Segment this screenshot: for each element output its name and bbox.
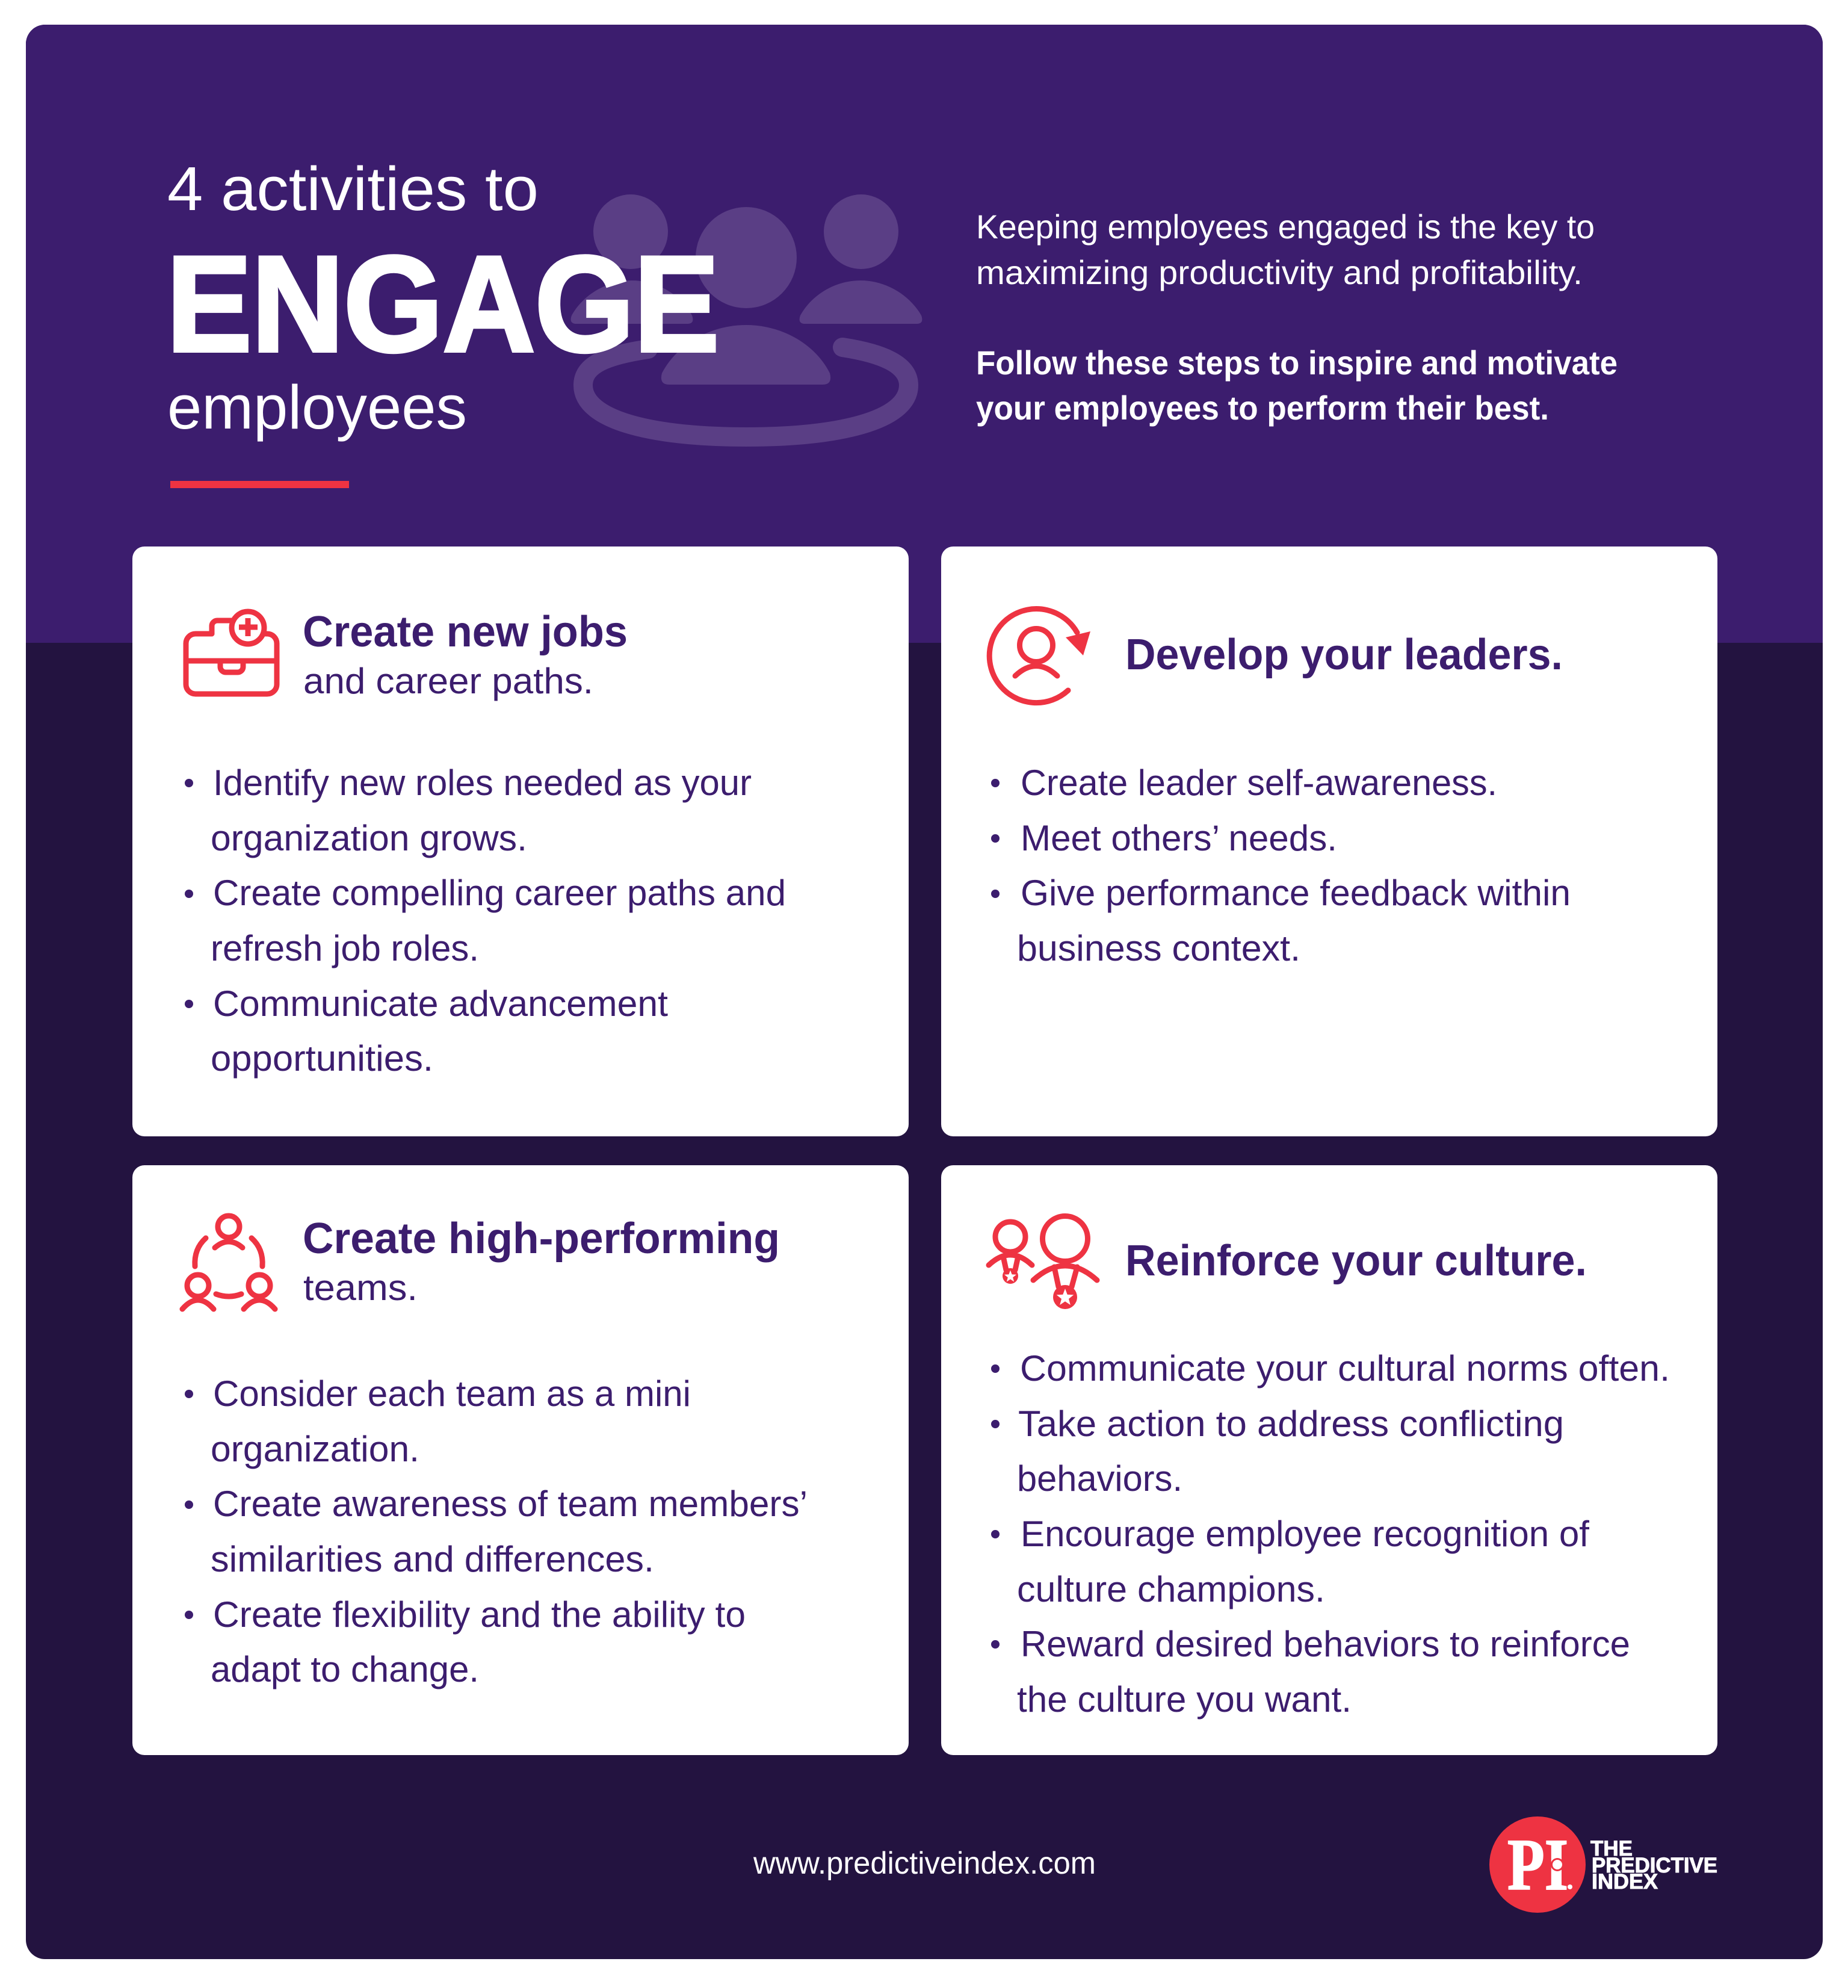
- logo: The Predictive Index: PI: [1507, 1824, 1568, 1906]
- bullet list: [991, 1348, 1670, 1720]
- website url: www.predictiveindex.com: [753, 1846, 1096, 1881]
- bullet list: Create leader self-awareness.: [1021, 763, 1497, 803]
- bullet list: Reward desired behaviors to reinforce: [1021, 1624, 1630, 1664]
- logo: The Predictive Index: PREDICTIVE: [1592, 1854, 1717, 1877]
- bullet list: adapt to change.: [211, 1649, 479, 1689]
- bullet list: Communicate advancement: [213, 983, 668, 1024]
- heading: [303, 1215, 780, 1308]
- heading: teams.: [303, 1268, 418, 1308]
- logo: The Predictive Index: THE: [1590, 1837, 1633, 1860]
- bullet list: refresh job roles.: [211, 928, 479, 968]
- heading: and career paths.: [303, 661, 593, 701]
- bullet list: Communicate your cultural norms often.: [1020, 1348, 1670, 1389]
- heading: Develop your leaders.: [1125, 631, 1563, 679]
- title: ENGAGE: [167, 228, 719, 380]
- heading: Create high-performing: [303, 1215, 780, 1263]
- logo: The Predictive Index: [1489, 1816, 1717, 1913]
- bullet list: [185, 1373, 808, 1689]
- bullet list: Create flexibility and the ability to: [213, 1594, 746, 1635]
- bullet list: organization grows.: [211, 818, 527, 858]
- bullet list: culture champions.: [1017, 1569, 1325, 1609]
- title: 4 activities to: [167, 154, 539, 223]
- bullet list: the culture you want.: [1017, 1679, 1352, 1720]
- icon: ghost team in a circle: [571, 194, 922, 437]
- panel: create new jobs: [132, 547, 909, 1136]
- intro text: maximizing productivity and profitability.: [976, 253, 1583, 291]
- bullet list: [185, 763, 786, 1079]
- icon: briefcase with plus: [186, 612, 277, 694]
- intro text: [976, 208, 1618, 427]
- bullet list: Create awareness of team members’: [213, 1484, 808, 1524]
- bullet list: Encourage employee recognition of: [1021, 1514, 1589, 1554]
- heading: Create new jobs: [303, 608, 628, 656]
- bullet list: Meet others’ needs.: [1021, 818, 1337, 858]
- title: [167, 154, 719, 442]
- icon: three connected people: [182, 1216, 275, 1309]
- accent underline: [170, 481, 349, 488]
- bullet list: Consider each team as a mini: [213, 1373, 691, 1414]
- bullet list: Identify new roles needed as your: [213, 763, 752, 803]
- panel: reinforce your culture: [941, 1165, 1717, 1755]
- panel: develop your leaders: [941, 547, 1717, 1136]
- bullet list: [991, 763, 1571, 968]
- bullet list: similarities and differences.: [211, 1539, 654, 1579]
- logo: The Predictive Index: INDEX: [1592, 1870, 1658, 1894]
- bullet list: opportunities.: [211, 1038, 433, 1079]
- icon: person with circular arrow: [989, 609, 1090, 703]
- bullet list: business context.: [1017, 928, 1300, 968]
- bullet list: behaviors.: [1017, 1458, 1182, 1499]
- intro text: your employees to perform their best.: [976, 389, 1549, 427]
- bullet list: organization.: [211, 1429, 419, 1469]
- bullet list: Create compelling career paths and: [213, 873, 786, 913]
- bullet list: Give performance feedback within: [1021, 873, 1571, 913]
- intro text: Follow these steps to inspire and motivate: [976, 344, 1618, 382]
- panel: create high-performing teams: [132, 1165, 909, 1755]
- bullet list: Take action to address conflicting: [1018, 1404, 1564, 1444]
- intro text: Keeping employees engaged is the key to: [976, 208, 1595, 246]
- heading: Reinforce your culture.: [1125, 1237, 1587, 1285]
- heading: [303, 608, 628, 701]
- title: employees: [167, 373, 467, 442]
- icon: two people with medals: [989, 1216, 1097, 1309]
